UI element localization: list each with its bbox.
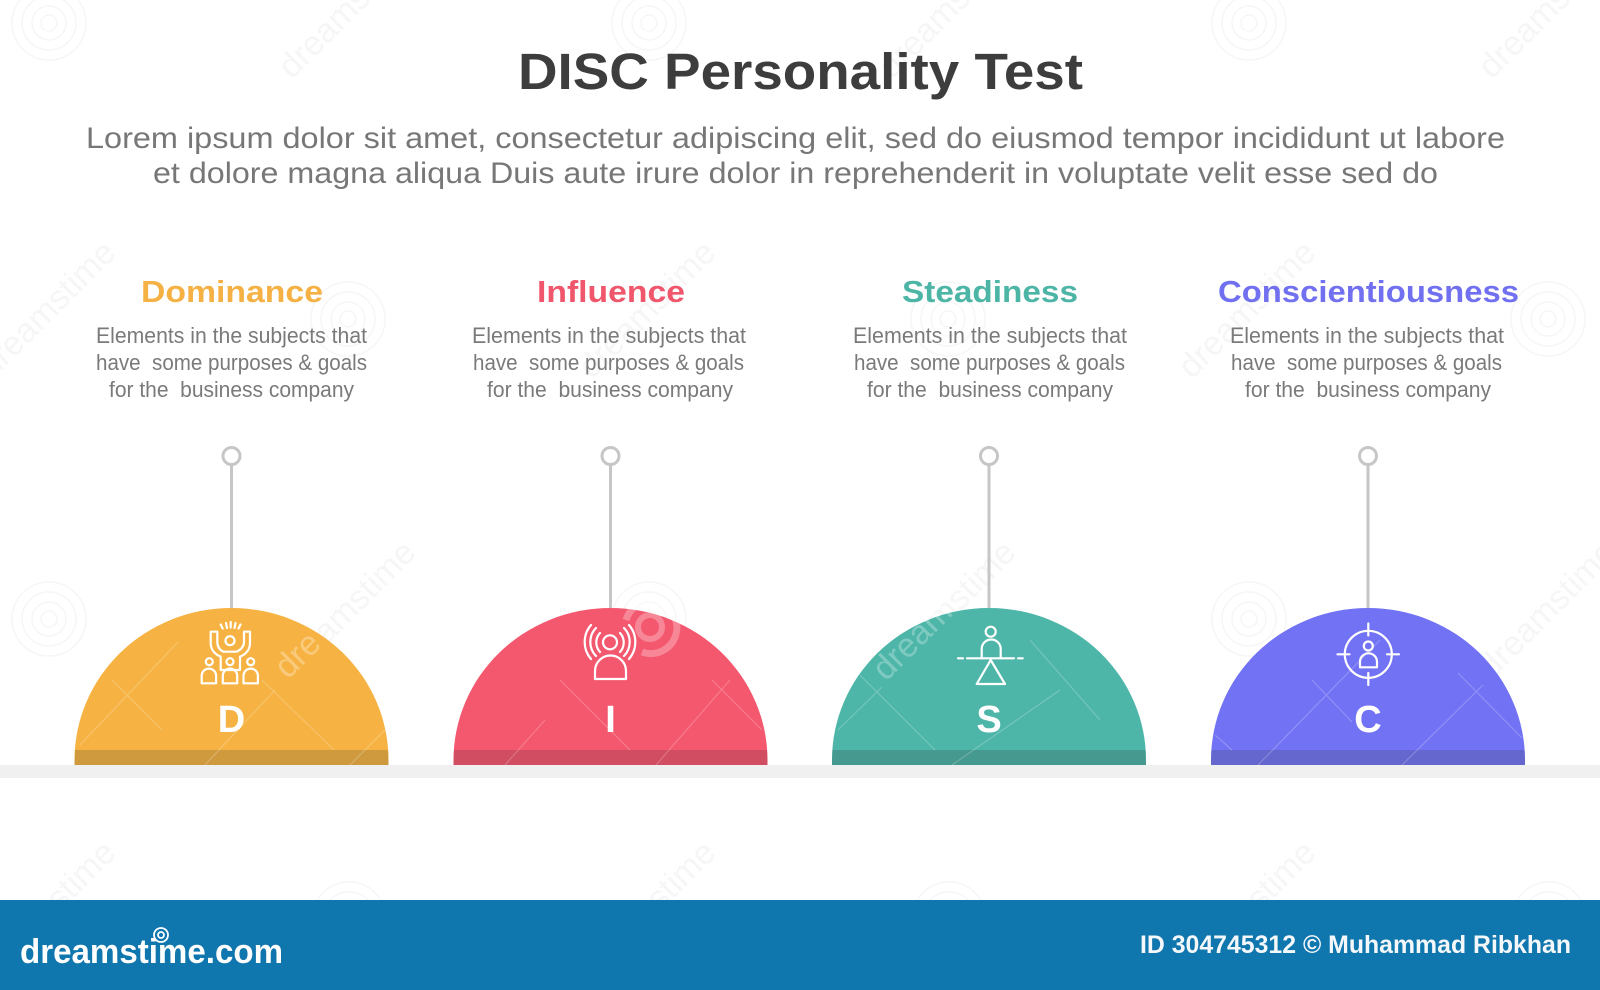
- footer bar: [0, 900, 1600, 990]
- heading: Influence: Influence: [537, 274, 685, 309]
- description: Steadiness: Elements in the subjects that: [853, 323, 1127, 348]
- icon: raised-arms leader with team: [202, 622, 258, 683]
- description: Steadiness: have some purposes & goals: [854, 350, 1125, 375]
- description: Influence: have some purposes & goals: [473, 350, 744, 375]
- description: Dominance: for the business company: [109, 377, 354, 402]
- description: Steadiness: for the business company: [867, 377, 1113, 402]
- description: Conscientiousness: have some purposes & goals: [1231, 350, 1502, 375]
- credit text: ID 304745312 © Muhammad Ribkhan: [1140, 931, 1571, 959]
- letter I: I: [605, 699, 616, 741]
- heading: Dominance: Dominance: [141, 274, 323, 309]
- baseline shelf: [0, 765, 1600, 778]
- subtitle text block: [86, 122, 1505, 190]
- title: DISC Personality Test: [518, 43, 1083, 100]
- semicircle: C: [1211, 608, 1525, 765]
- description: Steadiness: [853, 323, 1127, 402]
- subtitle text block: Lorem ipsum dolor sit amet, consectetur adipiscing elit, sed do eiusmod tempor incididunt ut labore: [86, 122, 1505, 155]
- description: Influence: Elements in the subjects that: [472, 323, 746, 348]
- heading: Steadiness: Steadiness: [902, 274, 1078, 309]
- semicircle: I: [454, 602, 768, 765]
- text: dreamstime: [571, 233, 723, 386]
- description: Dominance: [96, 323, 367, 402]
- semicircle: S: [832, 581, 1146, 765]
- letter C: C: [1354, 699, 1382, 741]
- letter S: S: [976, 699, 1002, 741]
- semicircle: D: dre: [267, 624, 328, 686]
- description: Dominance: have some purposes & goals: [96, 350, 367, 375]
- icon: person in crosshair target: [1338, 624, 1399, 685]
- connector pin: [1360, 448, 1376, 608]
- panel: Dominance: [74, 274, 388, 765]
- connector pin: [980, 448, 998, 608]
- heading: Conscientiousness: Conscientiousness: [1218, 274, 1519, 309]
- text: dreamstime: [1171, 233, 1323, 386]
- subtitle text block: et dolore magna aliqua Duis aute irure dolor in reprehenderit in voluptate velit esse sed do: [153, 157, 1438, 190]
- panel: Conscientiousness: [1211, 274, 1525, 765]
- letter D: D: [218, 699, 245, 741]
- description: Conscientiousness: [1230, 323, 1504, 402]
- text: dreamstime: [571, 833, 723, 986]
- text: dreamstime: [871, 533, 1023, 686]
- text: dreamstime: [1171, 833, 1323, 986]
- semicircle: D: [74, 608, 388, 765]
- description: Influence: [472, 323, 746, 402]
- icon: person balancing on scale: [958, 627, 1023, 684]
- semicircle: S: dreams: [865, 581, 972, 688]
- logo: dreamstime.com: dreamstime.com: [20, 933, 283, 971]
- icon: broadcasting person: [585, 625, 635, 679]
- panel: Steadiness: [832, 274, 1146, 765]
- panel: Influence: [454, 274, 768, 765]
- connector pin: [223, 448, 240, 608]
- description: Influence: for the business company: [487, 377, 733, 402]
- connector pin: [602, 448, 619, 608]
- description: Dominance: Elements in the subjects that: [96, 323, 367, 348]
- text: dreamstime: [271, 533, 423, 686]
- description: Conscientiousness: Elements in the subjects that: [1230, 323, 1504, 348]
- description: Conscientiousness: for the business company: [1245, 377, 1491, 402]
